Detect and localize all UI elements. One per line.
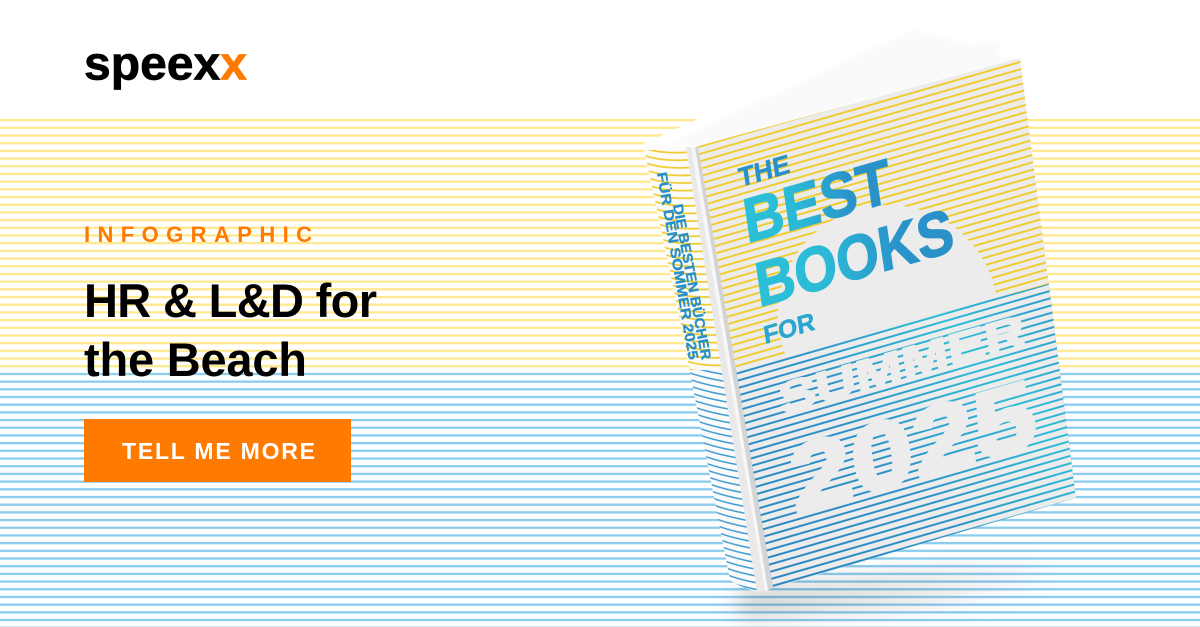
background: blue stripes [0, 373, 1200, 627]
cover text: the: THE [736, 149, 792, 193]
cover text: 2025: 2025 [782, 360, 1043, 536]
spine title [654, 171, 715, 361]
book shadow [738, 556, 1040, 620]
cover text: books: BOOKS [751, 196, 958, 321]
book spine [643, 144, 760, 592]
spine title: FÜR DEN SOMMER 2025 [654, 171, 702, 361]
cover text: best: BEST [739, 147, 895, 257]
book hinge [686, 146, 773, 592]
cover text: summer: SUMMER [775, 306, 1028, 425]
heading: the Beach [84, 333, 307, 386]
book [643, 58, 1076, 592]
button: tell me more: TELL ME MORE [122, 438, 315, 464]
button: tell me more [84, 419, 351, 482]
cover text: for: FOR [762, 308, 817, 350]
heading: HR & L&D for [84, 274, 377, 327]
heading [84, 274, 377, 386]
book cover [698, 58, 1076, 588]
background: yellow stripes [0, 119, 1200, 369]
book top: pages and back board [643, 21, 1022, 150]
cover: blue stripes [736, 284, 1076, 588]
cover: sun [778, 205, 996, 354]
cover: yellow stripes [698, 60, 1049, 368]
spine title: DIE BESTEN BÜCHER [670, 203, 715, 361]
logo: speexx: speexx [84, 36, 247, 90]
label: infographic: INFOGRAPHIC [84, 222, 312, 247]
